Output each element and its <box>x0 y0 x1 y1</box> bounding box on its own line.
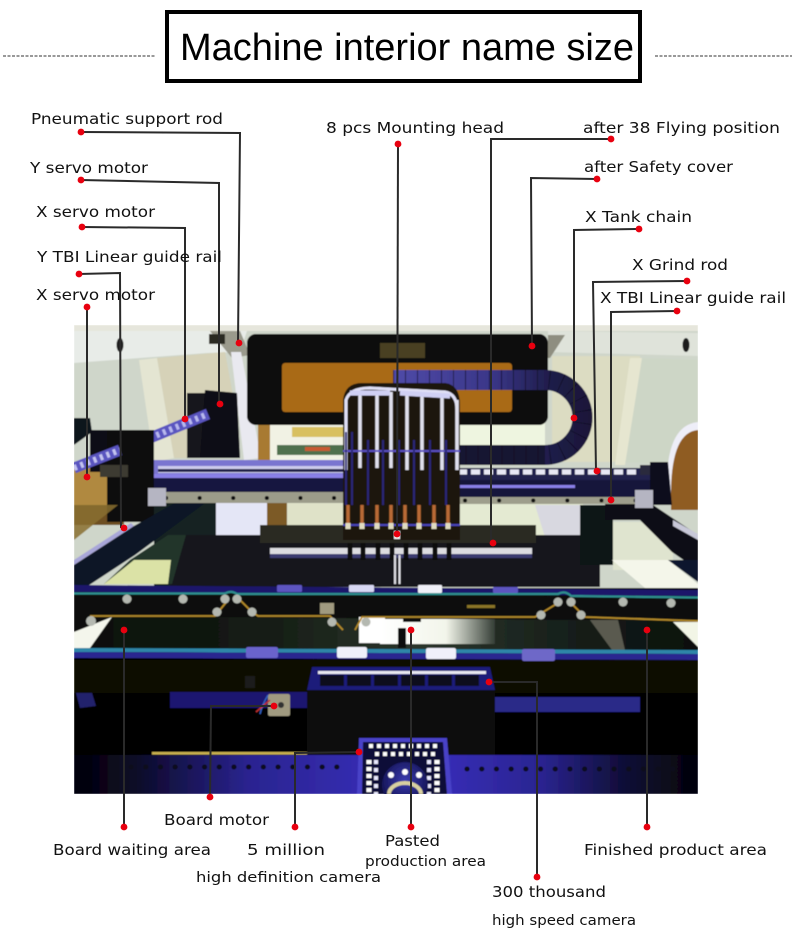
callout: Y TBI Linear guide rail <box>36 248 222 531</box>
callout: X TBI Linear guide rail: X TBI Linear guide rail <box>600 289 786 307</box>
callout: X TBI Linear guide rail <box>600 289 786 503</box>
callout: X Grind rod <box>593 256 728 474</box>
callout: 5 million high definition camera: 5 million <box>247 841 325 859</box>
placement head <box>343 383 460 540</box>
right frame <box>580 505 613 565</box>
stepper motor <box>268 694 290 716</box>
callout: X Grind rod: X Grind rod <box>632 256 728 274</box>
lower machine bed <box>74 652 698 756</box>
gantry base <box>214 503 267 535</box>
callout: Finished product area: Finished product area <box>584 841 767 859</box>
callout: X Tank chain <box>571 208 692 421</box>
callout: Pneumatic support rod <box>31 110 242 346</box>
callout: X servo motor lower <box>36 286 156 480</box>
callout: 300 thousand high speed camera: high speed camera <box>492 913 636 929</box>
callout: Y servo motor <box>29 159 223 407</box>
callout: 300 thousand high speed camera <box>486 679 636 929</box>
callout: Pneumatic support rod: Pneumatic support rod <box>31 110 223 128</box>
callout: Board motor <box>164 703 277 829</box>
callout: X servo motor lower: X servo motor <box>36 286 156 304</box>
callout: 5 million high definition camera: high definition camera <box>196 870 381 886</box>
callout: X Tank chain: X Tank chain <box>585 208 692 226</box>
callout: X servo motor upper <box>36 203 188 422</box>
X rail right <box>455 468 660 480</box>
callout: Pasted production area: Pasted <box>385 832 440 850</box>
right dashed divider <box>655 55 792 57</box>
callout: Y TBI Linear guide rail: Y TBI Linear guide rail <box>36 248 222 266</box>
callout: 8 pcs Mounting head: 8 pcs Mounting head <box>326 119 504 137</box>
callout: Board waiting area <box>53 627 211 859</box>
high definition camera unit <box>357 738 452 794</box>
callout: after Safety cover <box>529 158 734 349</box>
title box <box>167 12 640 81</box>
cable carrier drawing <box>393 380 582 455</box>
callout: X servo motor upper: X servo motor <box>36 203 156 221</box>
callout: Pasted production area <box>365 627 486 870</box>
callout: after Safety cover: after Safety cover <box>584 158 734 176</box>
X rail left <box>154 460 344 474</box>
callout: Finished product area <box>584 627 767 859</box>
callout: 300 thousand high speed camera: 300 thousand <box>492 883 606 901</box>
machine interior photo <box>74 325 698 808</box>
callout: 5 million high definition camera <box>196 749 381 886</box>
conveyor section <box>74 588 698 650</box>
left dashed divider <box>3 55 155 57</box>
callout: Board motor: Board motor <box>164 811 270 829</box>
callout: after 38 Flying position: after 38 Flying position <box>583 119 780 137</box>
callout: Board waiting area: Board waiting area <box>53 841 211 859</box>
title: Machine interior name size <box>180 27 634 69</box>
callout: 8 pcs Mounting head <box>326 119 504 537</box>
left carriage <box>74 467 108 506</box>
callout: Pasted production area: production area <box>365 854 486 870</box>
callout: after 38 Flying position <box>490 119 780 546</box>
high speed camera unit <box>307 690 495 755</box>
callout: Y servo motor: Y servo motor <box>29 159 149 177</box>
